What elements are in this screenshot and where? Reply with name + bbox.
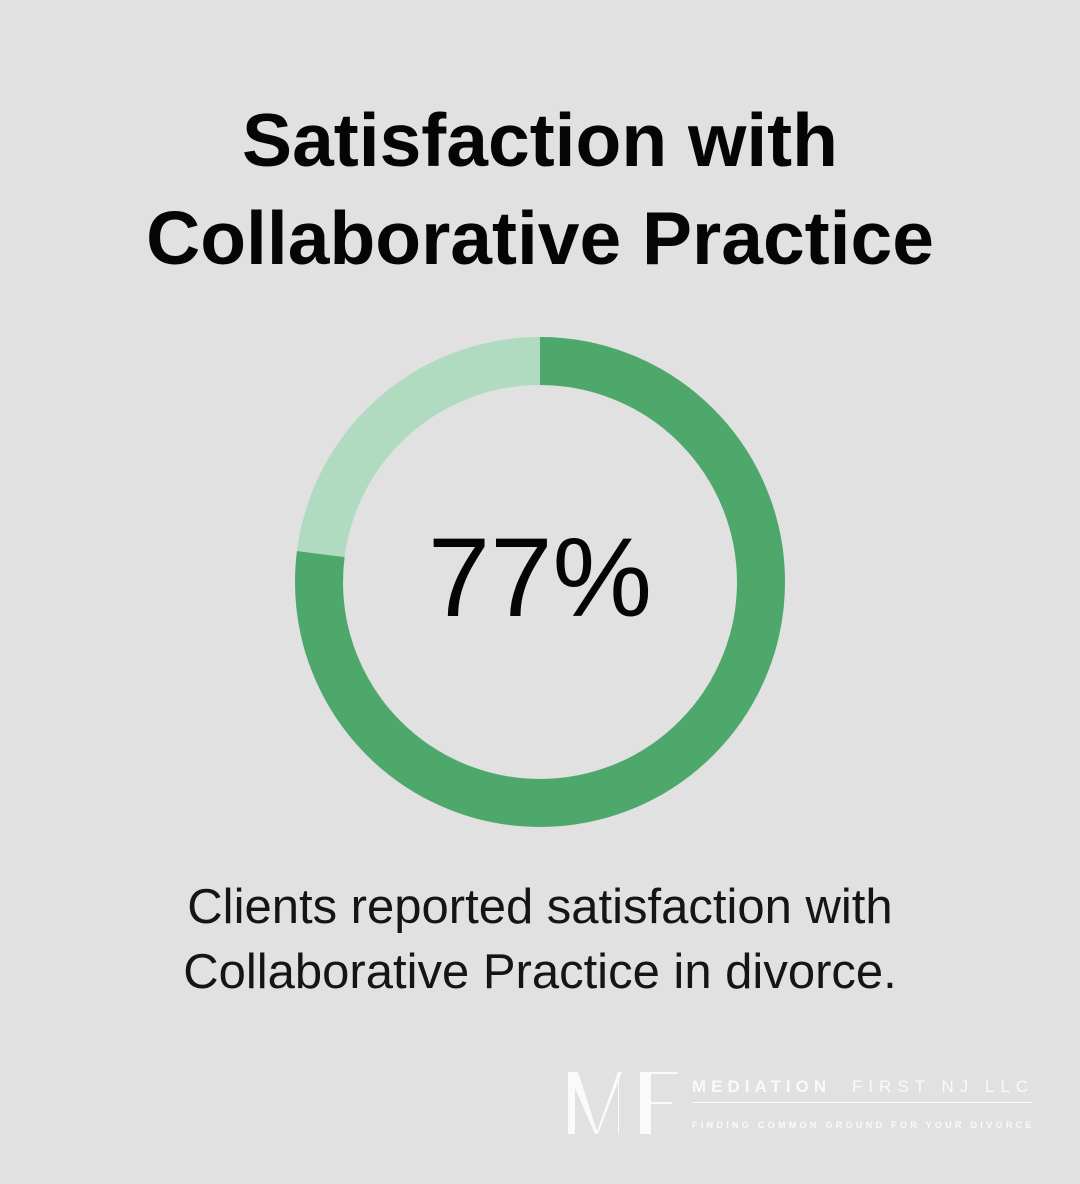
title: Satisfaction with xyxy=(242,98,838,182)
caption xyxy=(183,880,897,999)
caption: Clients reported satisfaction with xyxy=(187,880,893,934)
percentage value: 77% xyxy=(428,515,652,640)
logo text: MEDIATION xyxy=(692,1077,831,1096)
logo mark MF xyxy=(568,1072,678,1134)
logo text: FINDING COMMON GROUND FOR YOUR DIVORCE xyxy=(692,1120,1035,1130)
logo xyxy=(568,1072,1035,1134)
title: Collaborative Practice xyxy=(146,196,934,280)
caption: Collaborative Practice in divorce. xyxy=(183,945,897,999)
donut background segment xyxy=(319,361,761,803)
logo text: FIRST NJ LLC xyxy=(852,1077,1034,1096)
logo text xyxy=(692,1077,1035,1130)
title xyxy=(146,98,934,280)
donut value segment 77% xyxy=(319,361,761,803)
